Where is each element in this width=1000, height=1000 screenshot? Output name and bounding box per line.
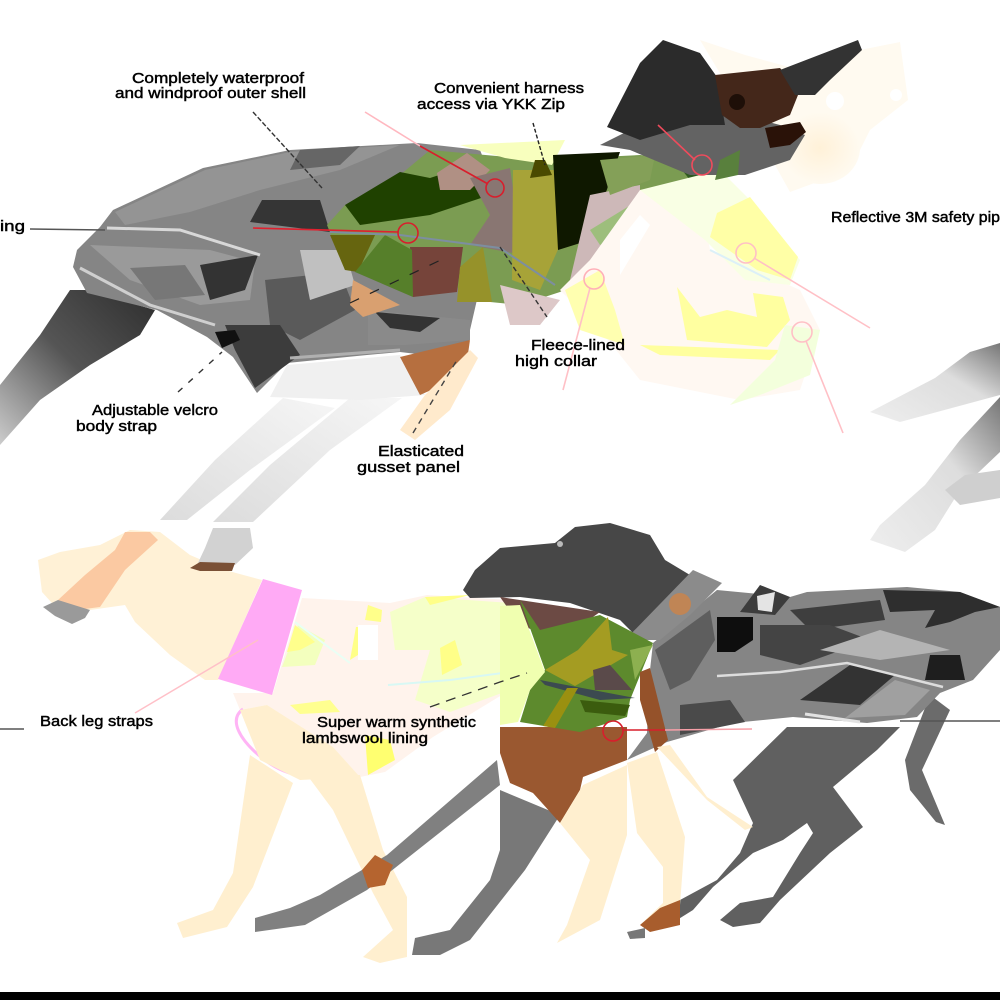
label: lambswool lining: Super warm synthetic [317,714,477,731]
top dog paw over tan head [43,600,90,624]
label: velcro strap [76,402,218,435]
callout: back leg line [135,640,258,713]
label: lambswool lining: lambswool lining [302,730,428,747]
top dog: chin green [715,150,740,180]
bottom dog: fleece collar [625,570,722,640]
bottom dog: brown overlap [500,727,627,823]
label: back leg straps: Back leg straps [40,713,153,730]
callout: back leg line left [0,728,24,730]
bottom dog: tan head and neck [38,530,262,680]
overlap band on tan head [58,532,158,612]
callout: head marker [692,155,712,175]
label: velcro strap: Adjustable velcro [92,402,218,419]
callout: zip line [533,123,545,165]
callout: piping line left [30,229,105,230]
callout: bottom line [623,729,665,731]
top dog: rear leg [0,290,155,445]
top dog: peach overlap [350,280,400,317]
top dog: eye [729,94,745,110]
callout: lining line [430,673,527,707]
callout: head line [658,125,695,160]
top dog: coloured coat overlap [327,140,740,325]
label: waterproof: Completely waterproof [132,70,305,87]
callout: bottom marker [603,721,623,741]
label: harness [417,80,584,113]
label: fleece collar: high collar [515,353,597,370]
bottom dog: pink leg strap [236,709,300,775]
front paw overlap [640,900,680,932]
top dog: white belly [270,355,425,400]
front paw tip [627,928,645,939]
callout: waterproof line [253,112,322,188]
label: waterproof [115,70,306,102]
bottom dog: tail [905,695,950,825]
top dog: orange chest [400,340,470,395]
label: waterproof: and windproof outer shell [115,85,306,102]
top dog: brown forehead [715,68,800,128]
top dog: gray coat [73,143,500,393]
top dog: black ear [607,40,725,140]
bottom dog: rear body and legs [677,727,900,927]
bottom dog: gray coat [627,585,1000,760]
bottom dog: pale coat [233,595,510,777]
label: velcro strap: body strap [76,418,157,435]
overlap on front leg [362,855,393,888]
callout: fleece hatch line [500,247,547,317]
callout: fleece marker [584,269,604,289]
top dog: right ear [780,40,862,95]
callout: chest line [806,341,843,433]
callout lines and markers [0,112,1000,741]
callout: fleece line [563,288,590,390]
label: gusset: Elasticated [378,443,464,460]
top dog: pale tan head [700,40,908,192]
callout: velcro line [178,352,222,392]
callout: coat interior line [350,257,447,303]
label: gusset: gusset panel [357,459,460,476]
callout: harness marker [486,179,504,197]
bottom dog: foreground tan legs [557,745,753,943]
label: reflective piping: Reflective 3M safety pip [831,209,1000,226]
eye highlight [557,541,563,547]
top dog: pale chest and coat [560,170,820,405]
callout: coat marker [398,223,418,243]
bottom dog: tan legs [177,705,407,963]
top dog: nose [765,122,806,148]
bottom dog: front leg one [255,760,500,932]
callout: chest marker [792,322,812,342]
label: fleece collar: Fleece-lined [531,337,625,354]
bottom dog: brown strap [640,668,668,752]
top dog: hind legs [160,343,1000,552]
callout: reflective marker [736,243,756,263]
bottom dog: pink collar [218,579,302,695]
bottom dog: gray head [463,523,690,640]
pale eye marks [826,89,902,110]
bottom dog: front leg two [412,790,560,955]
label: lambswool lining [302,714,477,747]
label: fleece collar [515,337,625,370]
top dog: coat tag [215,330,240,348]
bottom black bar [0,992,1000,1000]
callout: gusset line [413,360,457,433]
callout: harness line red [420,146,488,184]
label: piping end: ing [0,218,25,235]
callout: harness line [365,112,420,146]
callout: reflective line [754,258,870,328]
fleece collar orange patch [669,593,691,615]
callout: bottom line pale [665,729,752,730]
top dog hind paw [190,528,253,571]
bottom dog: coat logo tag [757,592,775,612]
top dog: pale front leg overlap [400,350,478,440]
callout: coat line red [253,228,398,232]
callout: right line [900,720,1000,722]
label: harness: access via YKK Zip [417,96,565,113]
top dog: gray muzzle [600,108,805,175]
label: gusset [357,443,464,476]
bottom dog: green overlap [500,597,653,732]
label: harness: Convenient harness [434,80,584,97]
